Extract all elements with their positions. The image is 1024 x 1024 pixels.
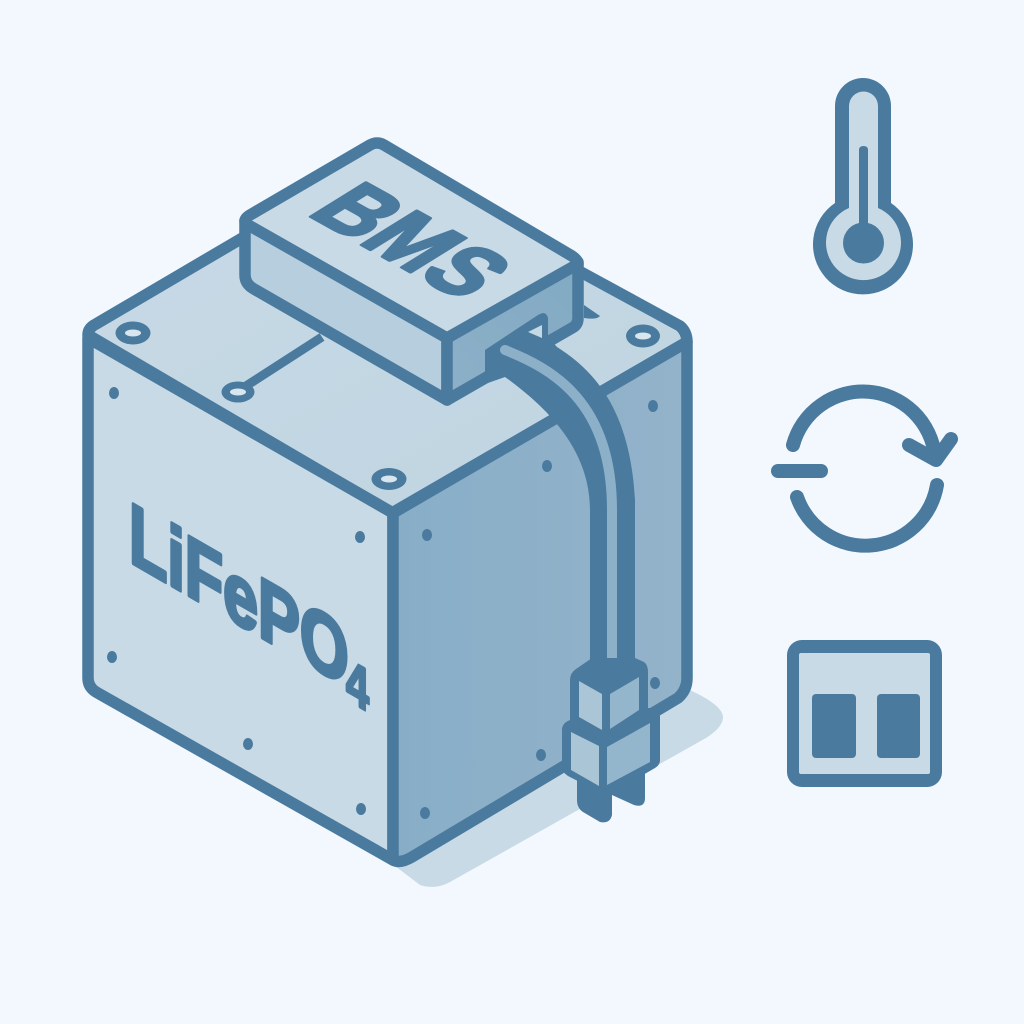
top face (88, 160, 687, 513)
screws (107, 387, 660, 819)
small terminal mark (584, 305, 600, 319)
BMS top (245, 143, 578, 338)
icon: thermometer (813, 78, 913, 294)
BMS right side (447, 262, 578, 400)
connector body (562, 658, 660, 796)
connector panels (579, 681, 602, 730)
connector (562, 658, 660, 822)
left face (88, 338, 393, 860)
mounting hole right (626, 324, 660, 348)
icon: charge cycle arrows (778, 392, 951, 546)
BMS module (245, 143, 578, 400)
mounting hole left (116, 322, 150, 344)
battery box (88, 160, 687, 861)
right face (393, 342, 687, 861)
cable notch window (528, 325, 542, 338)
cable highlight (505, 350, 612, 665)
BMS left side (245, 221, 447, 400)
top face wire and terminal (222, 337, 322, 402)
BMS label: BMS (289, 169, 535, 312)
icon: socket (787, 640, 942, 787)
LiFePO4 label: 4 (346, 646, 369, 726)
connector prongs (577, 765, 645, 822)
mounting hole front (372, 468, 406, 490)
LiFePO4 label: LiFePO (129, 483, 349, 706)
drop shadow under battery (395, 690, 723, 887)
cable (485, 313, 635, 665)
